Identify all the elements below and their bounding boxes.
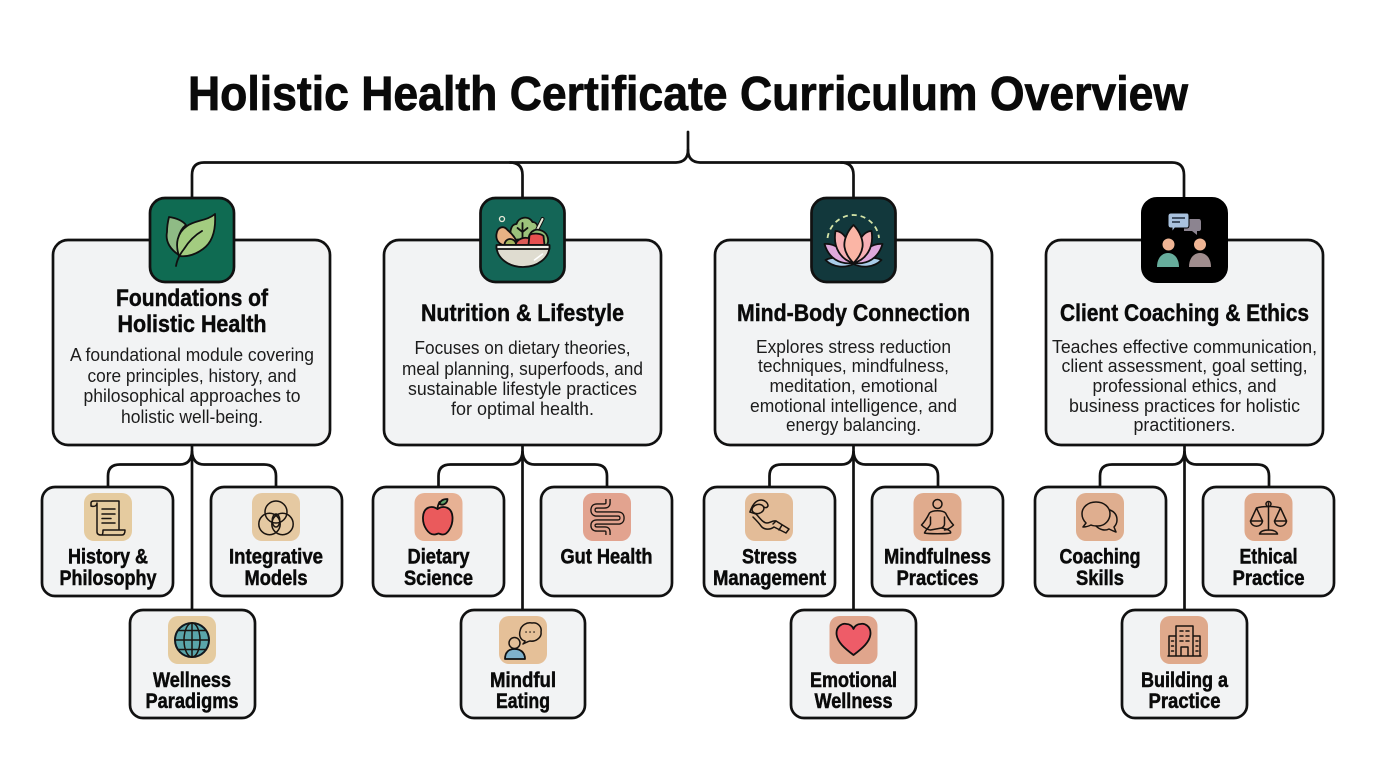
- connector: module to topics: [438, 445, 607, 610]
- heading: [116, 285, 269, 338]
- description: techniques, mindfulness,: [758, 355, 949, 376]
- label: Mindful: [490, 669, 556, 692]
- description: [402, 337, 643, 419]
- label: Emotional: [810, 669, 897, 692]
- topic: Mindfulness Practices: [872, 487, 1003, 596]
- icon: leaf: [150, 198, 234, 282]
- icon: intestines: [583, 493, 631, 541]
- heading: Mind-Body Connection: [737, 300, 970, 327]
- topic: Wellness Paradigms: [130, 610, 255, 718]
- icon: apple: [414, 493, 462, 541]
- label: [60, 546, 157, 590]
- label: Gut Health: [560, 546, 652, 568]
- topic: Emotional Wellness: [791, 610, 916, 718]
- description: Teaches effective communication,: [1052, 336, 1317, 357]
- description: emotional intelligence, and: [750, 395, 957, 416]
- label: [1232, 546, 1304, 590]
- topic: Dietary Science: [373, 487, 504, 596]
- icon: overlapping circles: [252, 493, 300, 541]
- panel: coaching: [1046, 240, 1323, 445]
- label: [146, 669, 238, 713]
- label: Science: [404, 567, 473, 590]
- topic: Mindful Eating: [461, 610, 585, 718]
- description: philosophical approaches to: [84, 385, 300, 406]
- label: [1141, 669, 1228, 713]
- description: [1052, 336, 1317, 435]
- heading: Nutrition & Lifestyle: [421, 300, 624, 327]
- description: client assessment, goal setting,: [1062, 355, 1308, 376]
- icon: globe: [168, 616, 216, 664]
- description: practitioners.: [1134, 414, 1236, 435]
- label: Practice: [1232, 567, 1304, 590]
- description: holistic well-being.: [121, 406, 263, 427]
- heading: Foundations of: [116, 285, 269, 312]
- label: [810, 669, 897, 713]
- label: Coaching: [1060, 546, 1140, 568]
- connector: title to modules: [192, 132, 1184, 198]
- description: for optimal health.: [451, 398, 594, 419]
- icon: reclining person: [745, 493, 793, 541]
- description: meditation, emotional: [770, 375, 938, 396]
- icon: heart: [830, 616, 878, 664]
- panel: foundations: [53, 240, 330, 445]
- description: [750, 336, 957, 435]
- topic: Integrative Models: [211, 487, 342, 596]
- description: [70, 344, 314, 427]
- label: Practice: [1148, 690, 1220, 713]
- panel: nutrition: [384, 240, 661, 445]
- topic: Ethical Practice: [1203, 487, 1334, 596]
- icon: scroll: [84, 493, 132, 541]
- description: Focuses on dietary theories,: [414, 337, 630, 358]
- heading: Holistic Health: [118, 311, 266, 338]
- connector: module to topics: [1100, 445, 1269, 610]
- connector: module to topics: [770, 445, 938, 610]
- topic: Gut Health: [541, 487, 672, 596]
- label: Wellness: [814, 690, 892, 713]
- connector: module to topics: [108, 445, 276, 610]
- label: Integrative: [229, 546, 323, 568]
- topic: Building a Practice: [1122, 610, 1247, 718]
- panel: mind-body: [715, 240, 992, 445]
- description: Explores stress reduction: [756, 336, 951, 357]
- description: core principles, history, and: [88, 365, 296, 386]
- column: Mind-Body Connection: [704, 198, 1003, 718]
- label: Stress: [742, 546, 797, 568]
- label: [884, 546, 991, 590]
- label: [229, 546, 323, 590]
- description: business practices for holistic: [1069, 395, 1300, 416]
- icon: person with thought bubble: [499, 616, 547, 664]
- label: Ethical: [1240, 546, 1298, 568]
- icon: two people talking: [1142, 198, 1227, 282]
- icon: lotus: [812, 198, 896, 282]
- label: [490, 669, 556, 713]
- label: History &: [68, 546, 148, 568]
- icon: meditating figure: [914, 493, 962, 541]
- description: A foundational module covering: [70, 344, 314, 365]
- description: meal planning, superfoods, and: [402, 358, 643, 379]
- topic: History & Philosophy: [42, 487, 173, 596]
- topic: Coaching Skills: [1035, 487, 1166, 596]
- label: Dietary: [408, 546, 470, 568]
- title: Holistic Health Certificate Curriculum Overview: [188, 68, 1189, 121]
- label: Practices: [896, 567, 978, 590]
- topic: Stress Management: [704, 487, 835, 596]
- icon: office building: [1160, 616, 1208, 664]
- label: Eating: [496, 690, 550, 713]
- icon: scales: [1244, 493, 1292, 541]
- label: [1060, 546, 1140, 590]
- label: Building a: [1141, 669, 1228, 692]
- label: Philosophy: [60, 567, 157, 590]
- description: sustainable lifestyle practices: [408, 378, 637, 399]
- label: Mindfulness: [884, 546, 991, 568]
- label: Wellness: [153, 669, 231, 692]
- column: Client Coaching & Ethics: [1035, 198, 1334, 718]
- label: Paradigms: [146, 690, 238, 713]
- label: Models: [244, 567, 308, 590]
- heading: Client Coaching & Ethics: [1060, 300, 1309, 327]
- column: Foundations of Holistic Health: [42, 198, 342, 718]
- icon: speech bubbles: [1076, 493, 1124, 541]
- description: professional ethics, and: [1092, 375, 1276, 396]
- label: [713, 546, 826, 590]
- label: Skills: [1076, 567, 1124, 590]
- icon: salad bowl: [480, 198, 564, 282]
- description: energy balancing.: [786, 414, 921, 435]
- column: Nutrition & Lifestyle: [373, 198, 672, 718]
- label: Management: [713, 567, 826, 590]
- label: [404, 546, 473, 590]
